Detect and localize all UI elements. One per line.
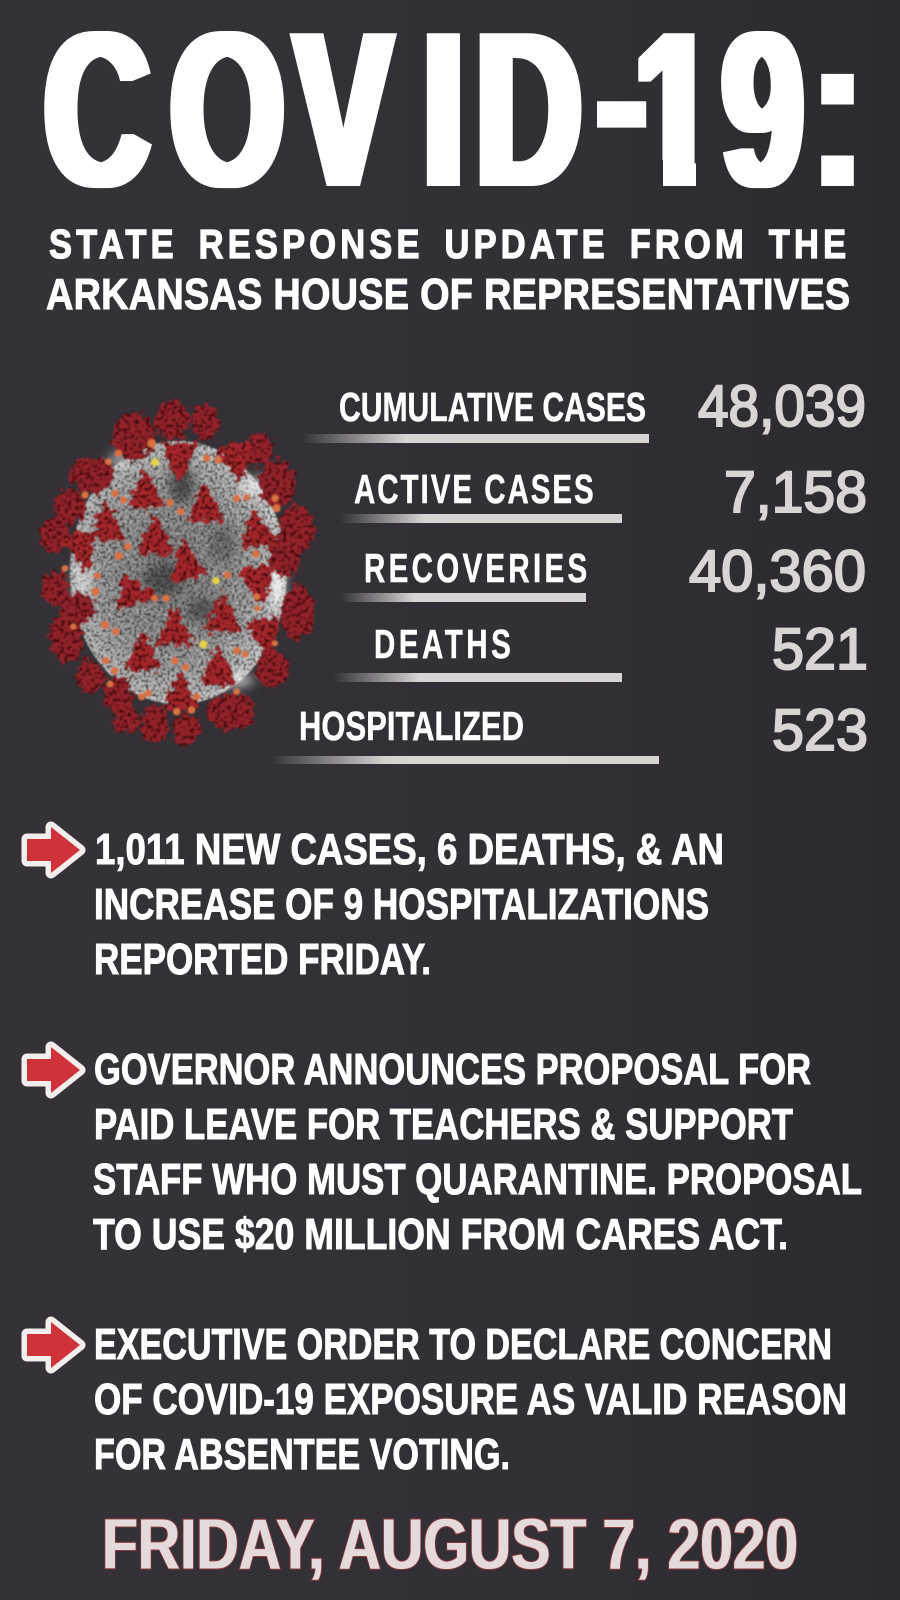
icon: red arrow (27, 827, 80, 873)
surface spikes (65, 445, 282, 707)
stat: hospitalized (270, 698, 868, 764)
stat: active cases: ACTIVE CASES (354, 466, 594, 512)
bullet 1 text: REPORTED FRIDAY. (94, 935, 431, 984)
subtitle line 1: STATE RESPONSE UPDATE FROM THE (49, 222, 850, 268)
yellow protein dots (151, 458, 220, 648)
stat: active cases (340, 460, 867, 525)
bullet 2 text (93, 1045, 862, 1259)
outer spikes (40, 401, 315, 745)
stat: recoveries: RECOVERIES (364, 545, 587, 591)
bullet 1 (27, 825, 724, 984)
stat: recoveries (340, 539, 866, 604)
sphere body (70, 441, 287, 704)
sphere shading (74, 453, 284, 687)
stat: deaths (333, 617, 868, 682)
stat: deaths: DEATHS (374, 621, 511, 667)
stat: cumulative cases: CUMULATIVE CASES (339, 384, 646, 430)
subtitle (46, 222, 850, 319)
icon: coronavirus illustration (40, 401, 315, 745)
stat: deaths: 521 (772, 617, 868, 682)
bullet 2 (27, 1045, 862, 1259)
stat: active cases: 7,158 (724, 460, 867, 525)
stat: hospitalized: 523 (772, 698, 868, 763)
icon: red arrow (27, 1047, 80, 1093)
bullet 3 (27, 1320, 847, 1479)
bullet 1 text: INCREASE OF 9 HOSPITALIZATIONS (94, 880, 709, 929)
bullet 1 text (94, 825, 724, 984)
bullet 3 text: FOR ABSENTEE VOTING. (94, 1430, 510, 1479)
stat: hospitalized: HOSPITALIZED (299, 703, 524, 749)
icon: red arrow (27, 1322, 80, 1368)
statistics table (270, 374, 868, 764)
orange protein dots (62, 439, 281, 715)
stat: cumulative cases: 48,039 (698, 374, 866, 439)
stat: cumulative cases (301, 374, 866, 443)
bullet 3 text (94, 1320, 847, 1479)
subtitle line 2: ARKANSAS HOUSE OF REPRESENTATIVES (46, 269, 850, 319)
stat: recoveries: 40,360 (689, 539, 866, 604)
bullet 1 text: 1,011 NEW CASES, 6 DEATHS, & AN (95, 825, 724, 874)
